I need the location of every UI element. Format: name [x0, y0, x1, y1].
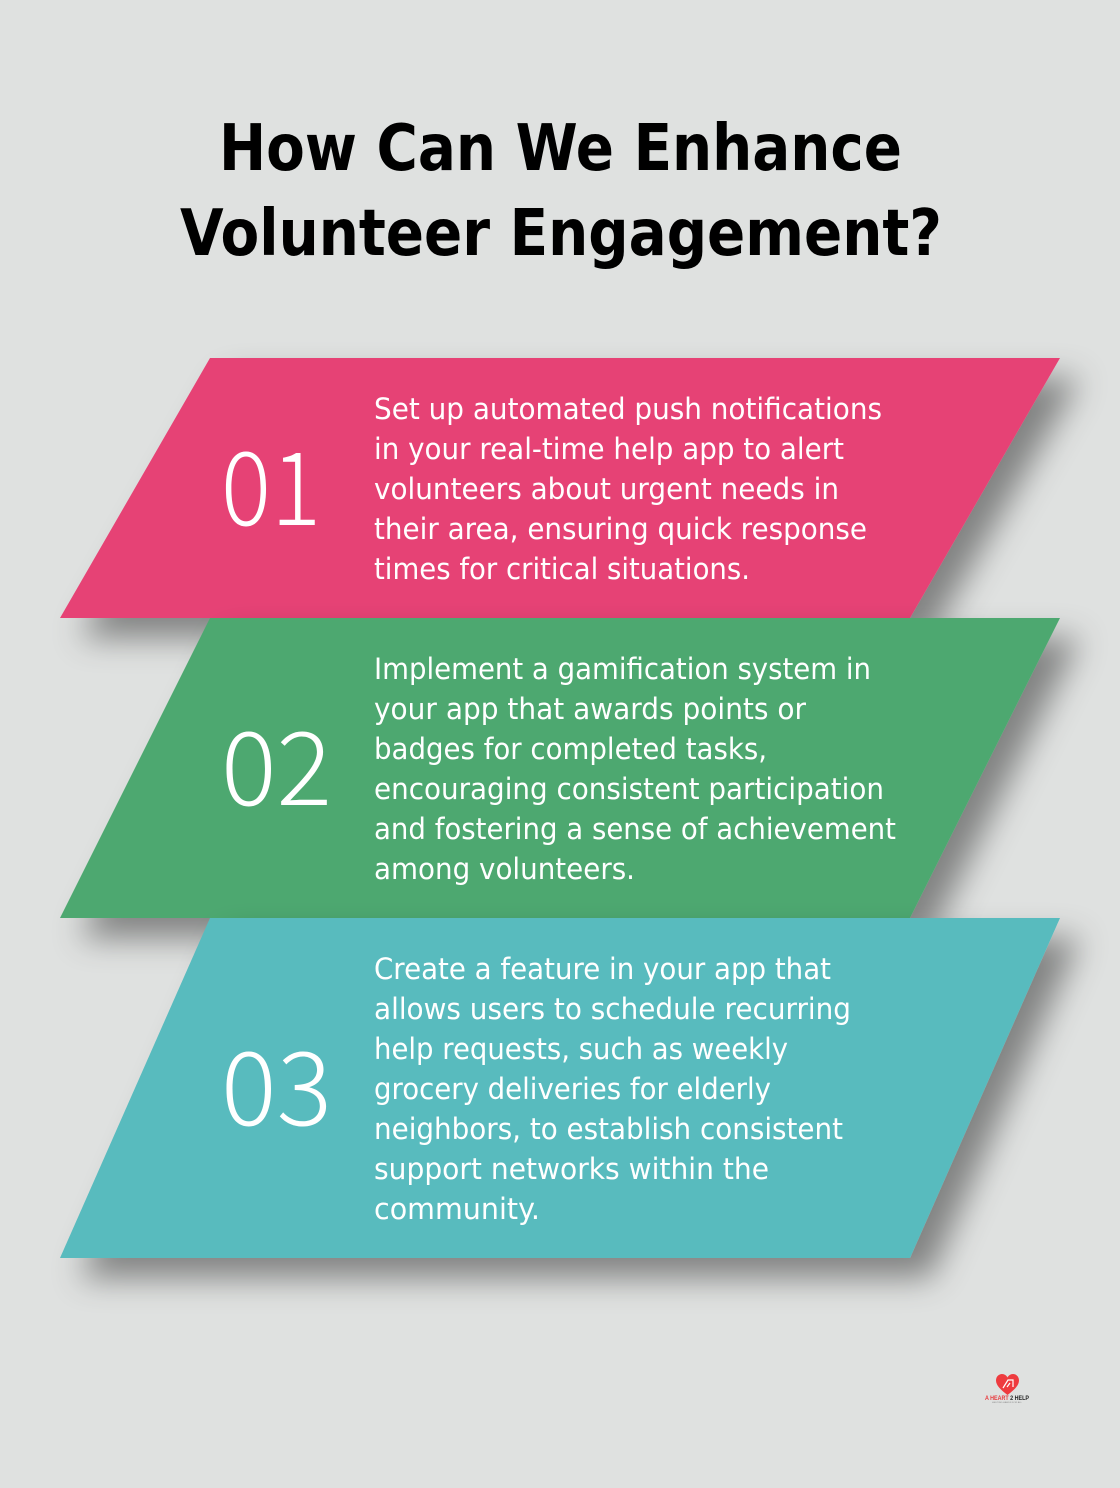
- text: step 03: [374, 952, 851, 1226]
- text: step 02: your app that awards points or: [374, 692, 806, 726]
- panel: step 01: [60, 358, 1060, 618]
- teal parallelogram: [60, 918, 1060, 1258]
- logo wordmark: A HEART 2 HELP: [985, 1395, 1030, 1402]
- number 01: 01: [221, 408, 321, 555]
- logo: A Heart 2 Help: [985, 1374, 1030, 1404]
- text: step 03: grocery deliveries for elderly: [374, 1072, 771, 1106]
- text: step 01: times for critical situations.: [374, 552, 750, 586]
- text: step 01: in your real-time help app to alert: [374, 432, 844, 466]
- text: step 03: Create a feature in your app that: [374, 952, 831, 986]
- panel: step 03: [60, 918, 1060, 1258]
- icon: hands: [1003, 1380, 1013, 1388]
- text: step 03: support networks within the: [374, 1152, 769, 1186]
- panel: step 02: [60, 618, 1060, 918]
- text: step 02: among volunteers.: [374, 852, 635, 886]
- text: step 03: neighbors, to establish consistent: [374, 1112, 843, 1146]
- pink parallelogram: [60, 358, 1060, 618]
- title: [180, 112, 942, 271]
- text: step 02: Implement a gamification system in: [374, 652, 871, 686]
- text: step 02: [374, 652, 896, 886]
- text: step 03: help requests, such as weekly: [374, 1032, 788, 1066]
- text: step 01: Set up automated push notifications: [374, 392, 882, 426]
- text: step 02: encouraging consistent participation: [374, 772, 884, 806]
- green parallelogram: [60, 618, 1060, 918]
- icon: heart: [996, 1374, 1019, 1395]
- logo tagline: HELPING HANDS FOR ALL: [992, 1401, 1023, 1404]
- text: step 01: their area, ensuring quick response: [374, 512, 867, 546]
- text: step 02: badges for completed tasks,: [374, 732, 767, 766]
- title: Volunteer Engagement?: [180, 197, 942, 271]
- text: step 01: [374, 392, 882, 586]
- text: step 01: volunteers about urgent needs in: [374, 472, 839, 506]
- number 03: 03: [221, 1008, 332, 1155]
- number 02: 02: [221, 688, 332, 835]
- text: step 02: and fostering a sense of achievement: [374, 812, 896, 846]
- title: How Can We Enhance: [219, 112, 902, 186]
- text: step 03: community.: [374, 1192, 540, 1226]
- text: step 03: allows users to schedule recurring: [374, 992, 851, 1026]
